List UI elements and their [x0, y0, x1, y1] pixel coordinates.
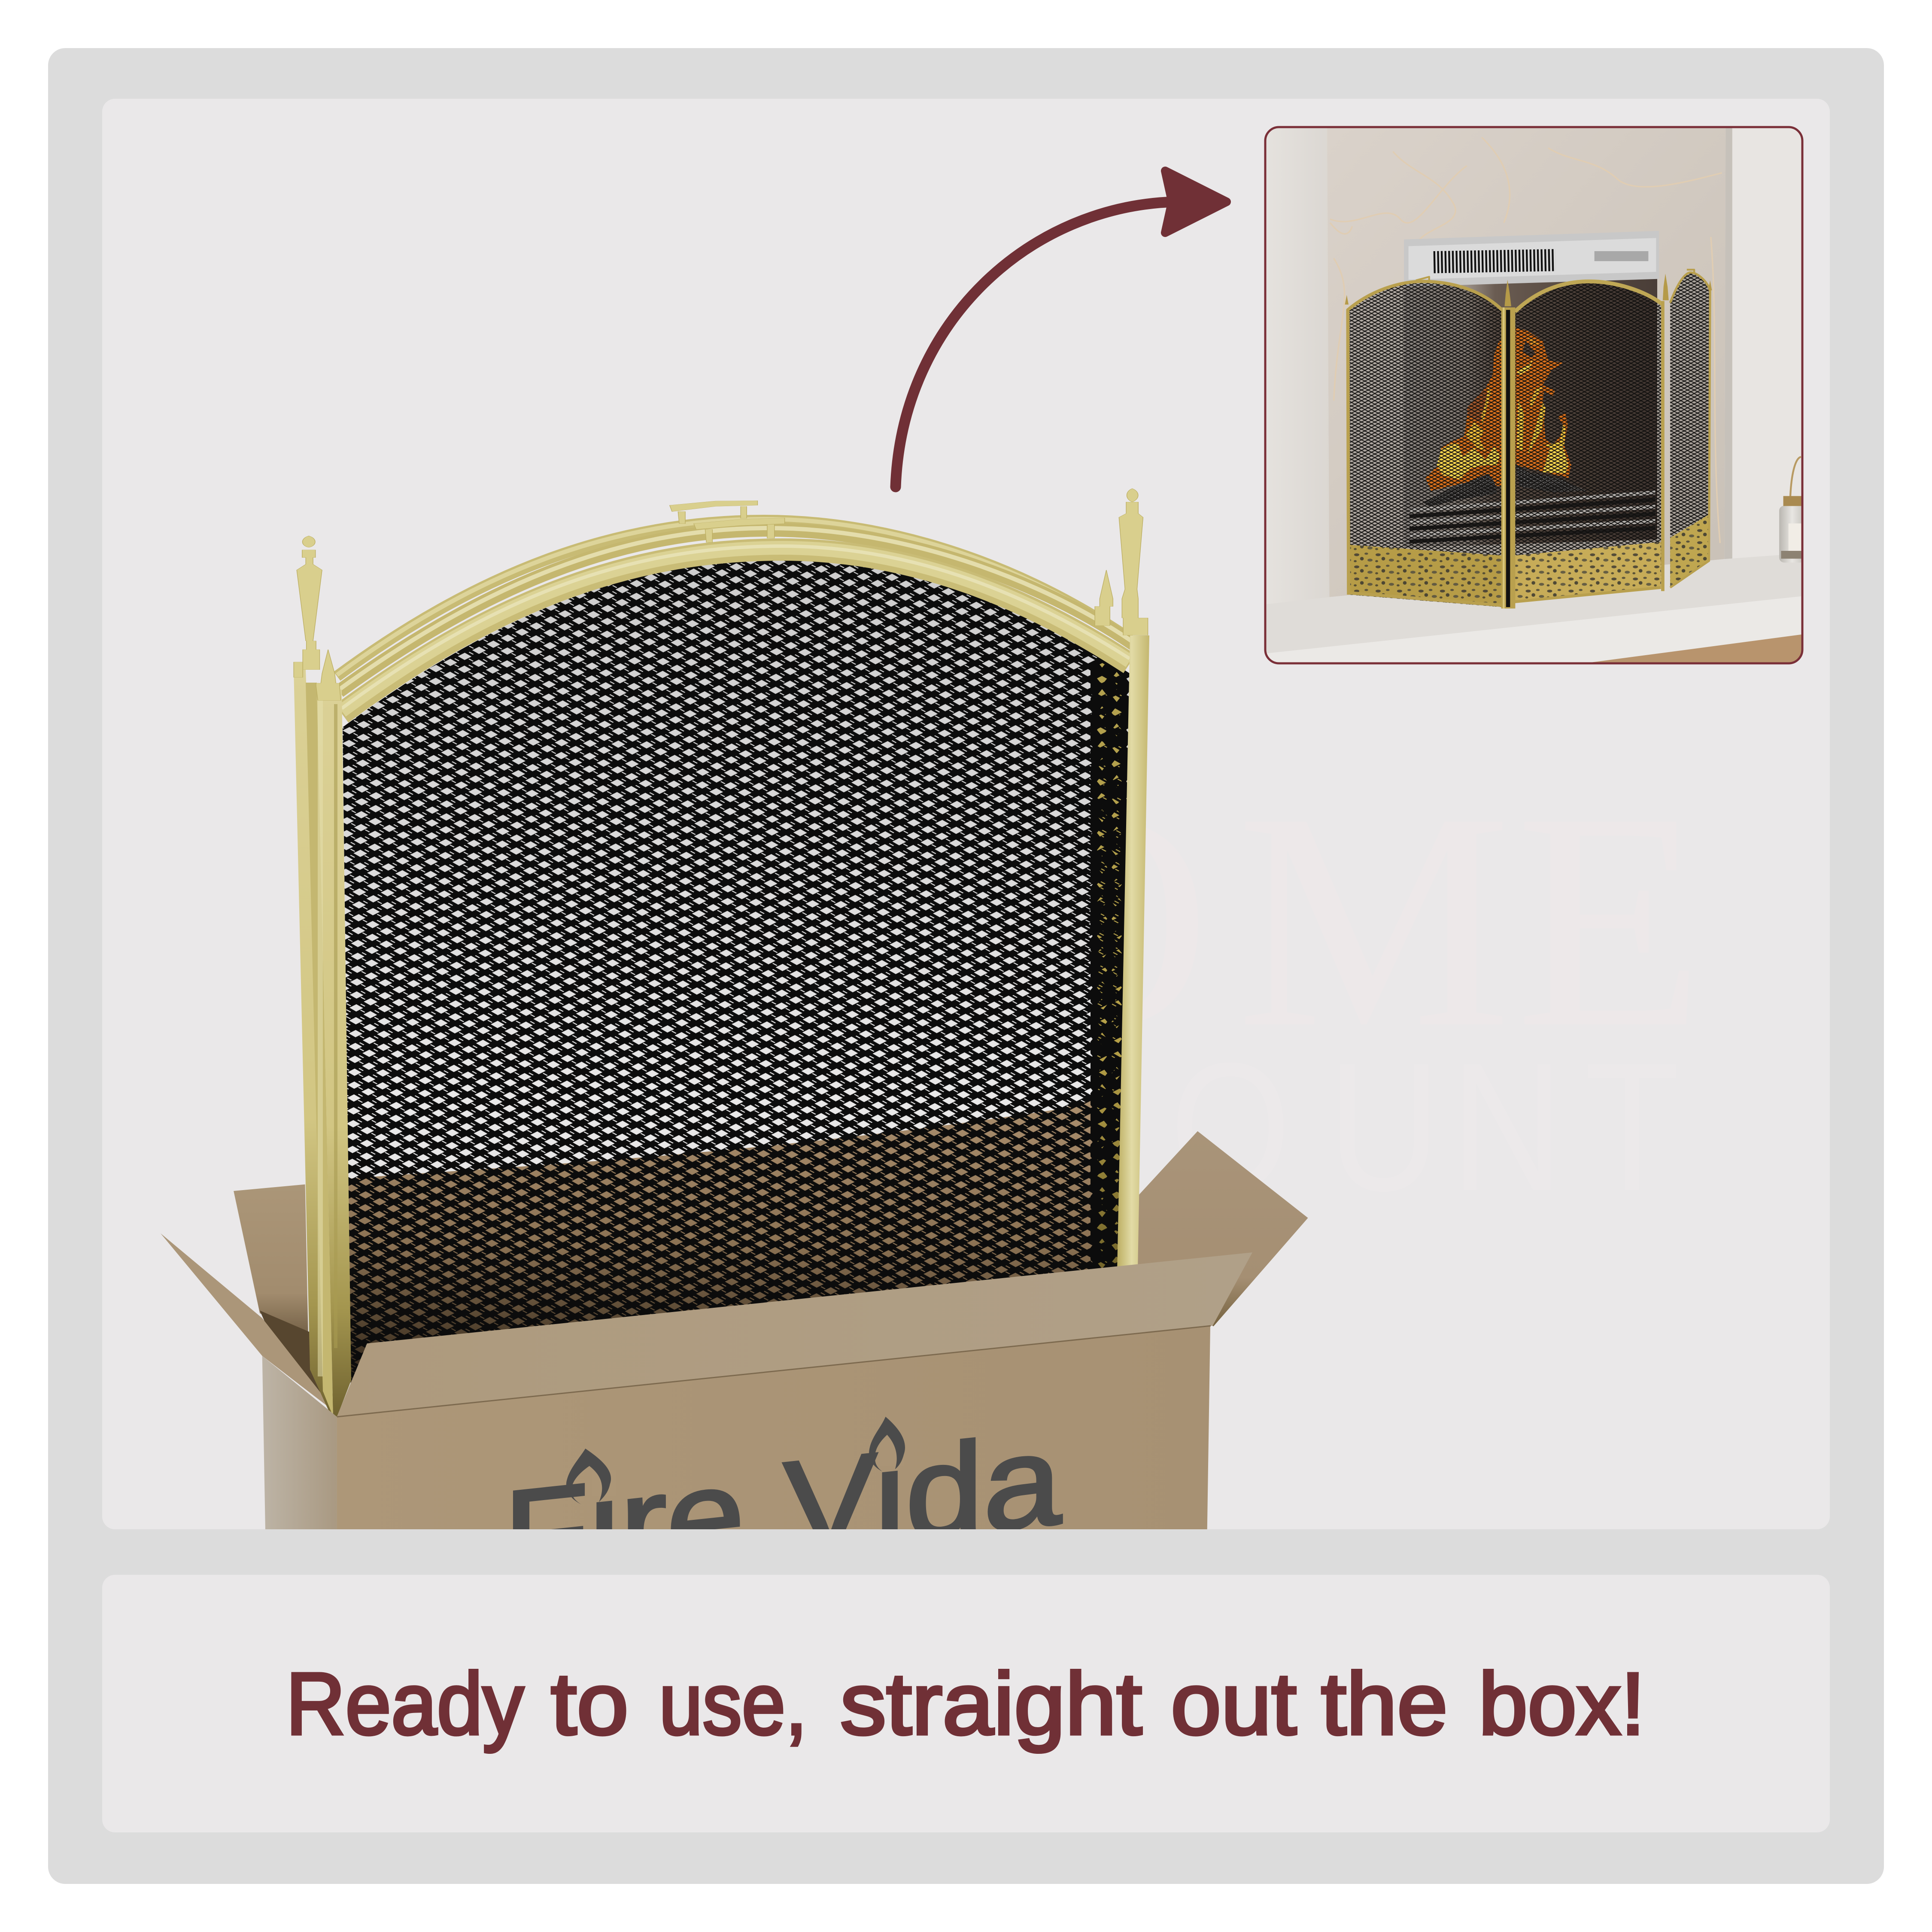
photo: decorative base of centre panel [1515, 542, 1661, 601]
caption text: Ready [286, 1655, 524, 1753]
photo: maroon border [1265, 127, 1802, 663]
box: front face [337, 1326, 1210, 1533]
watermark: DISCOUNT: DISCOUNT [687, 1024, 1680, 1229]
photo: gold frames [1348, 270, 1710, 605]
watermark: faint brand text [687, 749, 1704, 1229]
fireguard: second mesh layer along hinge edge [1091, 661, 1130, 1297]
box: left side flap [161, 1233, 337, 1413]
icon: flame over first i [566, 1449, 611, 1504]
photo: centre hinged post [1345, 273, 1712, 608]
photo: marble surround [1327, 123, 1725, 597]
photo: decorative base of right panel [1670, 514, 1709, 587]
photo: vent slots [1434, 260, 1555, 262]
box: front flap [337, 1252, 1252, 1417]
finial: right small [1095, 570, 1113, 626]
photo: shade behind screen panels [1345, 269, 1714, 611]
panel: caption bar [102, 1575, 1830, 1832]
caption text: box! [1479, 1655, 1645, 1753]
box: back right flap [1113, 1131, 1308, 1326]
fireguard: left hinged posts [294, 670, 351, 1417]
fireguard: rear folded arches [337, 519, 1133, 691]
illustration: fireguard rising out of the cardboard box [161, 489, 1308, 1609]
photo: wood floor [1552, 634, 1807, 668]
fireguard: front arched frame [342, 546, 1130, 714]
photo: glass jar with gold handle [1779, 457, 1805, 562]
watermark: HOME: HOME [730, 749, 1704, 1091]
photo: silver fireplace top [1404, 231, 1659, 287]
caption text [286, 1655, 1645, 1753]
fireguard: wire mesh screen [343, 560, 1130, 1425]
caption text: out [1171, 1655, 1297, 1753]
finial: left tall [297, 536, 322, 670]
caption text: the [1321, 1655, 1448, 1753]
finial: left cap [294, 662, 303, 677]
caption text: straight [840, 1655, 1142, 1753]
box: Fire Vida logo: Fire Vida [503, 1406, 1062, 1609]
panel: in-use fireplace photo inset [1260, 123, 1807, 668]
fireguard: right hinged posts [1117, 635, 1149, 1271]
caption text: use, [659, 1655, 807, 1753]
photo: wall background [1260, 123, 1807, 668]
photo: control display [1595, 251, 1648, 261]
caption text: to [551, 1655, 629, 1753]
photo: fireplace interior [1404, 276, 1657, 547]
handle: rear [670, 501, 757, 524]
panel: main image area [102, 99, 1830, 1529]
icon: flame over second i [869, 1417, 905, 1472]
photo: marble veins [1330, 137, 1722, 543]
photo: screen mesh over all panels [1345, 269, 1714, 611]
box: fold crease [337, 1326, 1211, 1417]
fireguard: mesh backdrop seen through the screen [335, 554, 1142, 1434]
photo: left wall [1260, 123, 1329, 605]
photo: right pillar shadow strip [1725, 123, 1732, 559]
arrow: curved maroon arrow to photo [896, 171, 1227, 487]
photo: logs [1422, 464, 1587, 507]
handle: front [694, 518, 785, 542]
box: back left flap [234, 1185, 308, 1340]
photo: flames [1425, 328, 1571, 491]
finial: left small [316, 650, 341, 700]
photo: hearth front [1260, 595, 1807, 668]
fireguard: finials and handles [294, 489, 1148, 700]
photo: hearth top [1260, 553, 1807, 654]
box: left outer face [262, 1356, 337, 1533]
finial: right tall [1119, 489, 1148, 635]
photo: decorative base of left panel [1349, 545, 1502, 605]
photo: grate bars [1410, 492, 1656, 541]
